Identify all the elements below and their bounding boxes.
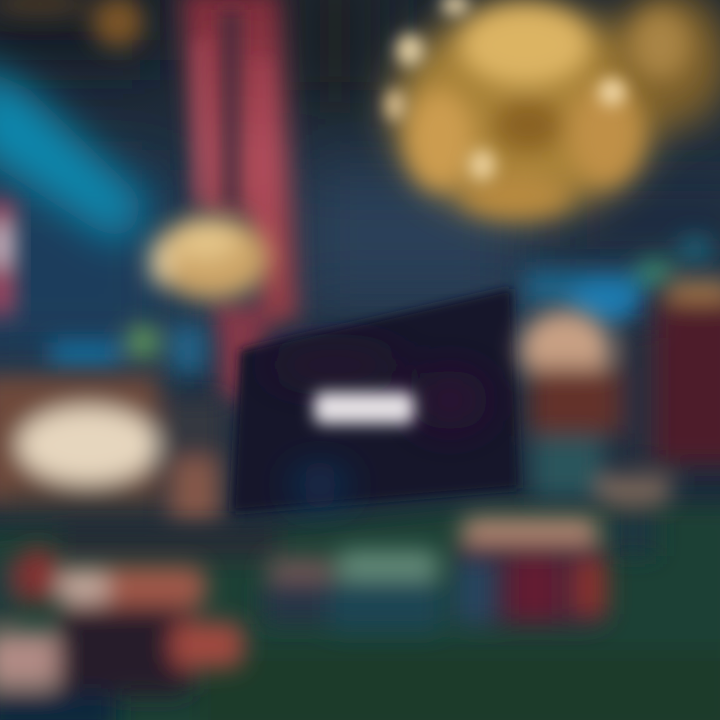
- left poker chip stacks: [0, 547, 244, 720]
- gold chandelier: [385, 0, 720, 217]
- laptop screen logo: [314, 392, 414, 424]
- right-side chip stacks and bottle: [519, 280, 720, 556]
- center poker chip stacks: [262, 518, 607, 632]
- left card table: [0, 375, 225, 525]
- green table surface: [0, 505, 720, 720]
- far-left pink light: [0, 200, 14, 315]
- laptop: [232, 288, 520, 512]
- top-left gold glow: [0, 0, 144, 48]
- teal light beam: [0, 60, 150, 245]
- left blue wall: [0, 0, 720, 360]
- blue and green background lights: [50, 236, 713, 373]
- hanging lamp: [150, 216, 270, 300]
- red curtains: [180, 0, 298, 405]
